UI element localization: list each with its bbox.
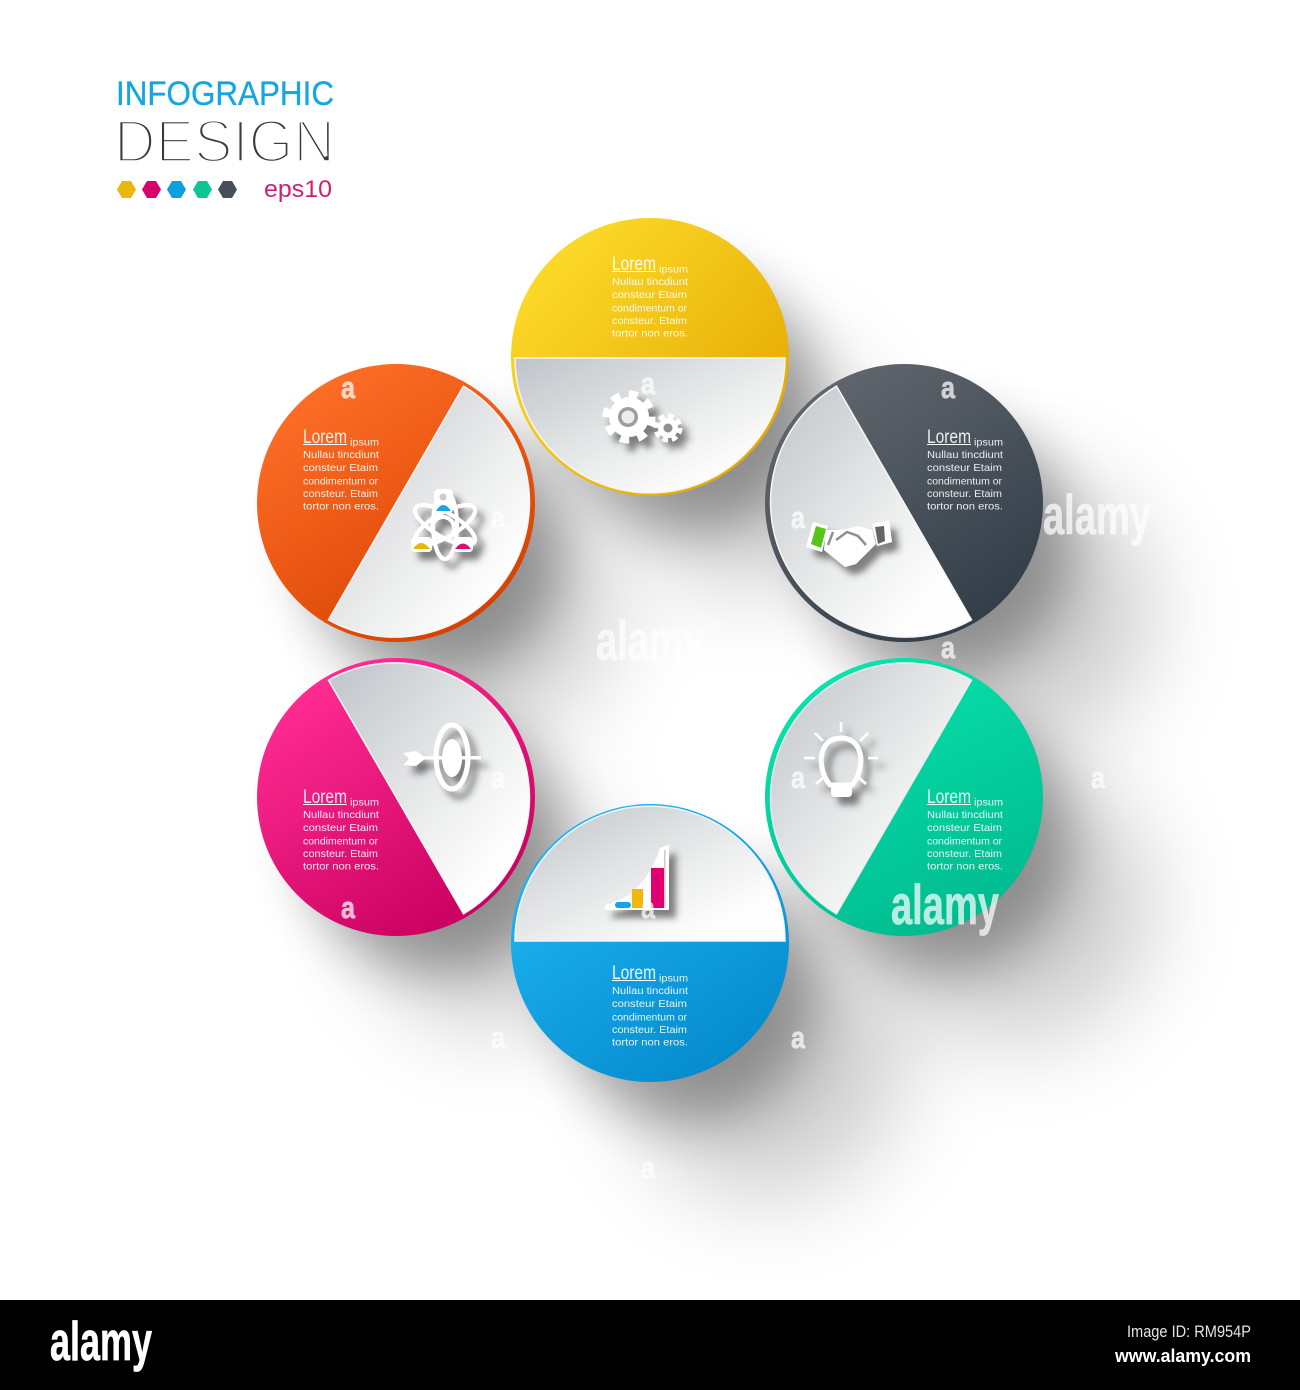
watermark letters: a — [791, 760, 806, 795]
watermark word: teal circle: alamy — [891, 873, 999, 936]
watermark letters: a — [941, 630, 956, 665]
text block: consteur. Etaim — [303, 488, 378, 500]
text block: condimentum or — [927, 836, 1002, 848]
text block: consteur. Etaim — [927, 848, 1002, 860]
text block: condimentum or — [612, 1012, 687, 1024]
text block: condimentum or — [303, 836, 378, 848]
title block — [114, 75, 335, 203]
watermark letters: a — [791, 1020, 806, 1055]
text block: tortor non eros. — [927, 500, 1003, 512]
watermark letters: a — [791, 500, 806, 535]
white panel — [515, 358, 785, 493]
circle: dark handshake — [765, 364, 1043, 642]
watermark letters: a — [641, 366, 656, 401]
text block: Nullau tincdiunt — [303, 809, 379, 821]
white panel — [515, 806, 785, 941]
soft cast shadows — [300, 268, 1150, 1195]
circle: orange atom — [257, 364, 535, 642]
text block: ipsum — [659, 972, 688, 984]
circle: pink target — [257, 658, 535, 936]
text block — [612, 963, 688, 1048]
text block: ipsum — [350, 436, 379, 448]
footer bar — [0, 1300, 1300, 1390]
text block: condimentum or — [612, 302, 687, 314]
hexagon colour swatches — [117, 181, 237, 198]
text block: Nullau tincdiunt — [927, 449, 1003, 461]
white panel — [771, 386, 972, 637]
watermarks — [341, 366, 1151, 1185]
text block: Lorem — [612, 254, 656, 275]
icon: gears — [606, 394, 680, 440]
text block: consteur Etaim — [612, 998, 687, 1010]
text block: ipsum — [974, 796, 1003, 808]
text block: condimentum or — [303, 476, 378, 488]
text block: tortor non eros. — [612, 328, 688, 340]
icon: light bulb — [804, 722, 878, 797]
watermark letters — [341, 366, 1106, 1185]
text block: tortor non eros. — [612, 1036, 688, 1048]
watermark letters: a — [491, 760, 506, 795]
watermark letters: a — [341, 890, 356, 925]
text block: consteur. Etaim — [612, 1024, 687, 1036]
watermark word: centre: alamy — [596, 609, 704, 672]
text block: consteur. Etaim — [612, 315, 687, 327]
text block: ipsum — [974, 436, 1003, 448]
icon: atom with people — [410, 489, 480, 559]
text block: consteur Etaim — [927, 822, 1002, 834]
text block: consteur Etaim — [303, 462, 378, 474]
text block: condimentum or — [927, 476, 1002, 488]
disc — [511, 218, 789, 496]
text block — [927, 787, 1003, 872]
text block: Nullau tincdiunt — [612, 985, 688, 997]
white panel — [328, 386, 529, 637]
text block: consteur Etaim — [927, 462, 1002, 474]
text block — [612, 254, 688, 340]
disc — [765, 658, 1043, 936]
watermark letters: a — [941, 370, 956, 405]
disc — [257, 658, 535, 936]
circle: yellow gears — [511, 218, 789, 496]
text block: ipsum — [659, 264, 688, 276]
text block: consteur Etaim — [612, 289, 687, 301]
heading: design: DESIGN — [114, 108, 335, 175]
text block: consteur. Etaim — [927, 488, 1002, 500]
text block: consteur. Etaim — [303, 848, 378, 860]
watermark letters: a — [341, 370, 356, 405]
image id: Image ID: RM954P — [1127, 1322, 1251, 1341]
watermark word: right: alamy — [1043, 483, 1151, 546]
text block: tortor non eros. — [303, 500, 379, 512]
watermark letters: a — [641, 1150, 656, 1185]
watermark letters: a — [491, 500, 506, 535]
watermark letters: a — [1091, 760, 1106, 795]
text block: Nullau tincdiunt — [927, 809, 1003, 821]
text block — [927, 427, 1003, 512]
icon: target with arrow — [403, 725, 481, 789]
text block: Lorem — [303, 427, 347, 448]
text block: Lorem — [927, 787, 971, 808]
label: eps10: eps10 — [264, 176, 332, 203]
website: www.alamy.com — [1114, 1346, 1251, 1366]
disc — [511, 804, 789, 1082]
heading: infographic: INFOGRAPHIC — [116, 75, 334, 113]
text block — [303, 427, 379, 512]
text block: Nullau tincdiunt — [303, 449, 379, 461]
text block: Lorem — [612, 963, 656, 984]
disc — [257, 364, 535, 642]
text block: ipsum — [350, 796, 379, 808]
icon: handshake — [806, 520, 892, 567]
watermark letters: a — [641, 890, 656, 925]
disc — [765, 364, 1043, 642]
text block: Nullau tincdiunt — [612, 276, 688, 288]
text block: tortor non eros. — [927, 860, 1003, 872]
text block — [303, 787, 379, 872]
circle: blue chart — [511, 804, 789, 1082]
white panel — [771, 663, 972, 914]
icon: bar chart — [605, 845, 669, 910]
circle: teal bulb — [765, 658, 1043, 936]
watermark letters: a — [491, 1020, 506, 1055]
footer logo: alamy — [50, 1310, 152, 1372]
text block: Lorem — [303, 787, 347, 808]
text block: Lorem — [927, 427, 971, 448]
text block: tortor non eros. — [303, 860, 379, 872]
text block: consteur Etaim — [303, 822, 378, 834]
white panel — [328, 663, 529, 914]
